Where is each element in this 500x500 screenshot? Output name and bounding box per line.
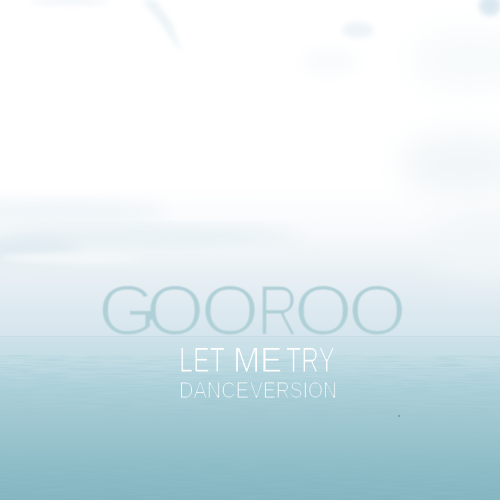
artist name: R: [257, 270, 299, 350]
song title: LET: [179, 341, 225, 380]
version subtitle: VERSION: [250, 377, 337, 403]
song title: TRY: [286, 341, 335, 380]
artist name: OO: [294, 271, 407, 351]
sky background: [0, 0, 500, 337]
artist name: GOO: [98, 271, 259, 351]
sea: [0, 337, 500, 500]
song title: ME: [233, 341, 282, 380]
song title: [179, 341, 335, 380]
clouds: [0, 0, 500, 275]
horizon line: [0, 336, 500, 337]
version subtitle: [179, 377, 337, 403]
version subtitle: DANCE: [179, 377, 249, 403]
boat speck: [398, 415, 400, 417]
artist name: [98, 270, 407, 351]
